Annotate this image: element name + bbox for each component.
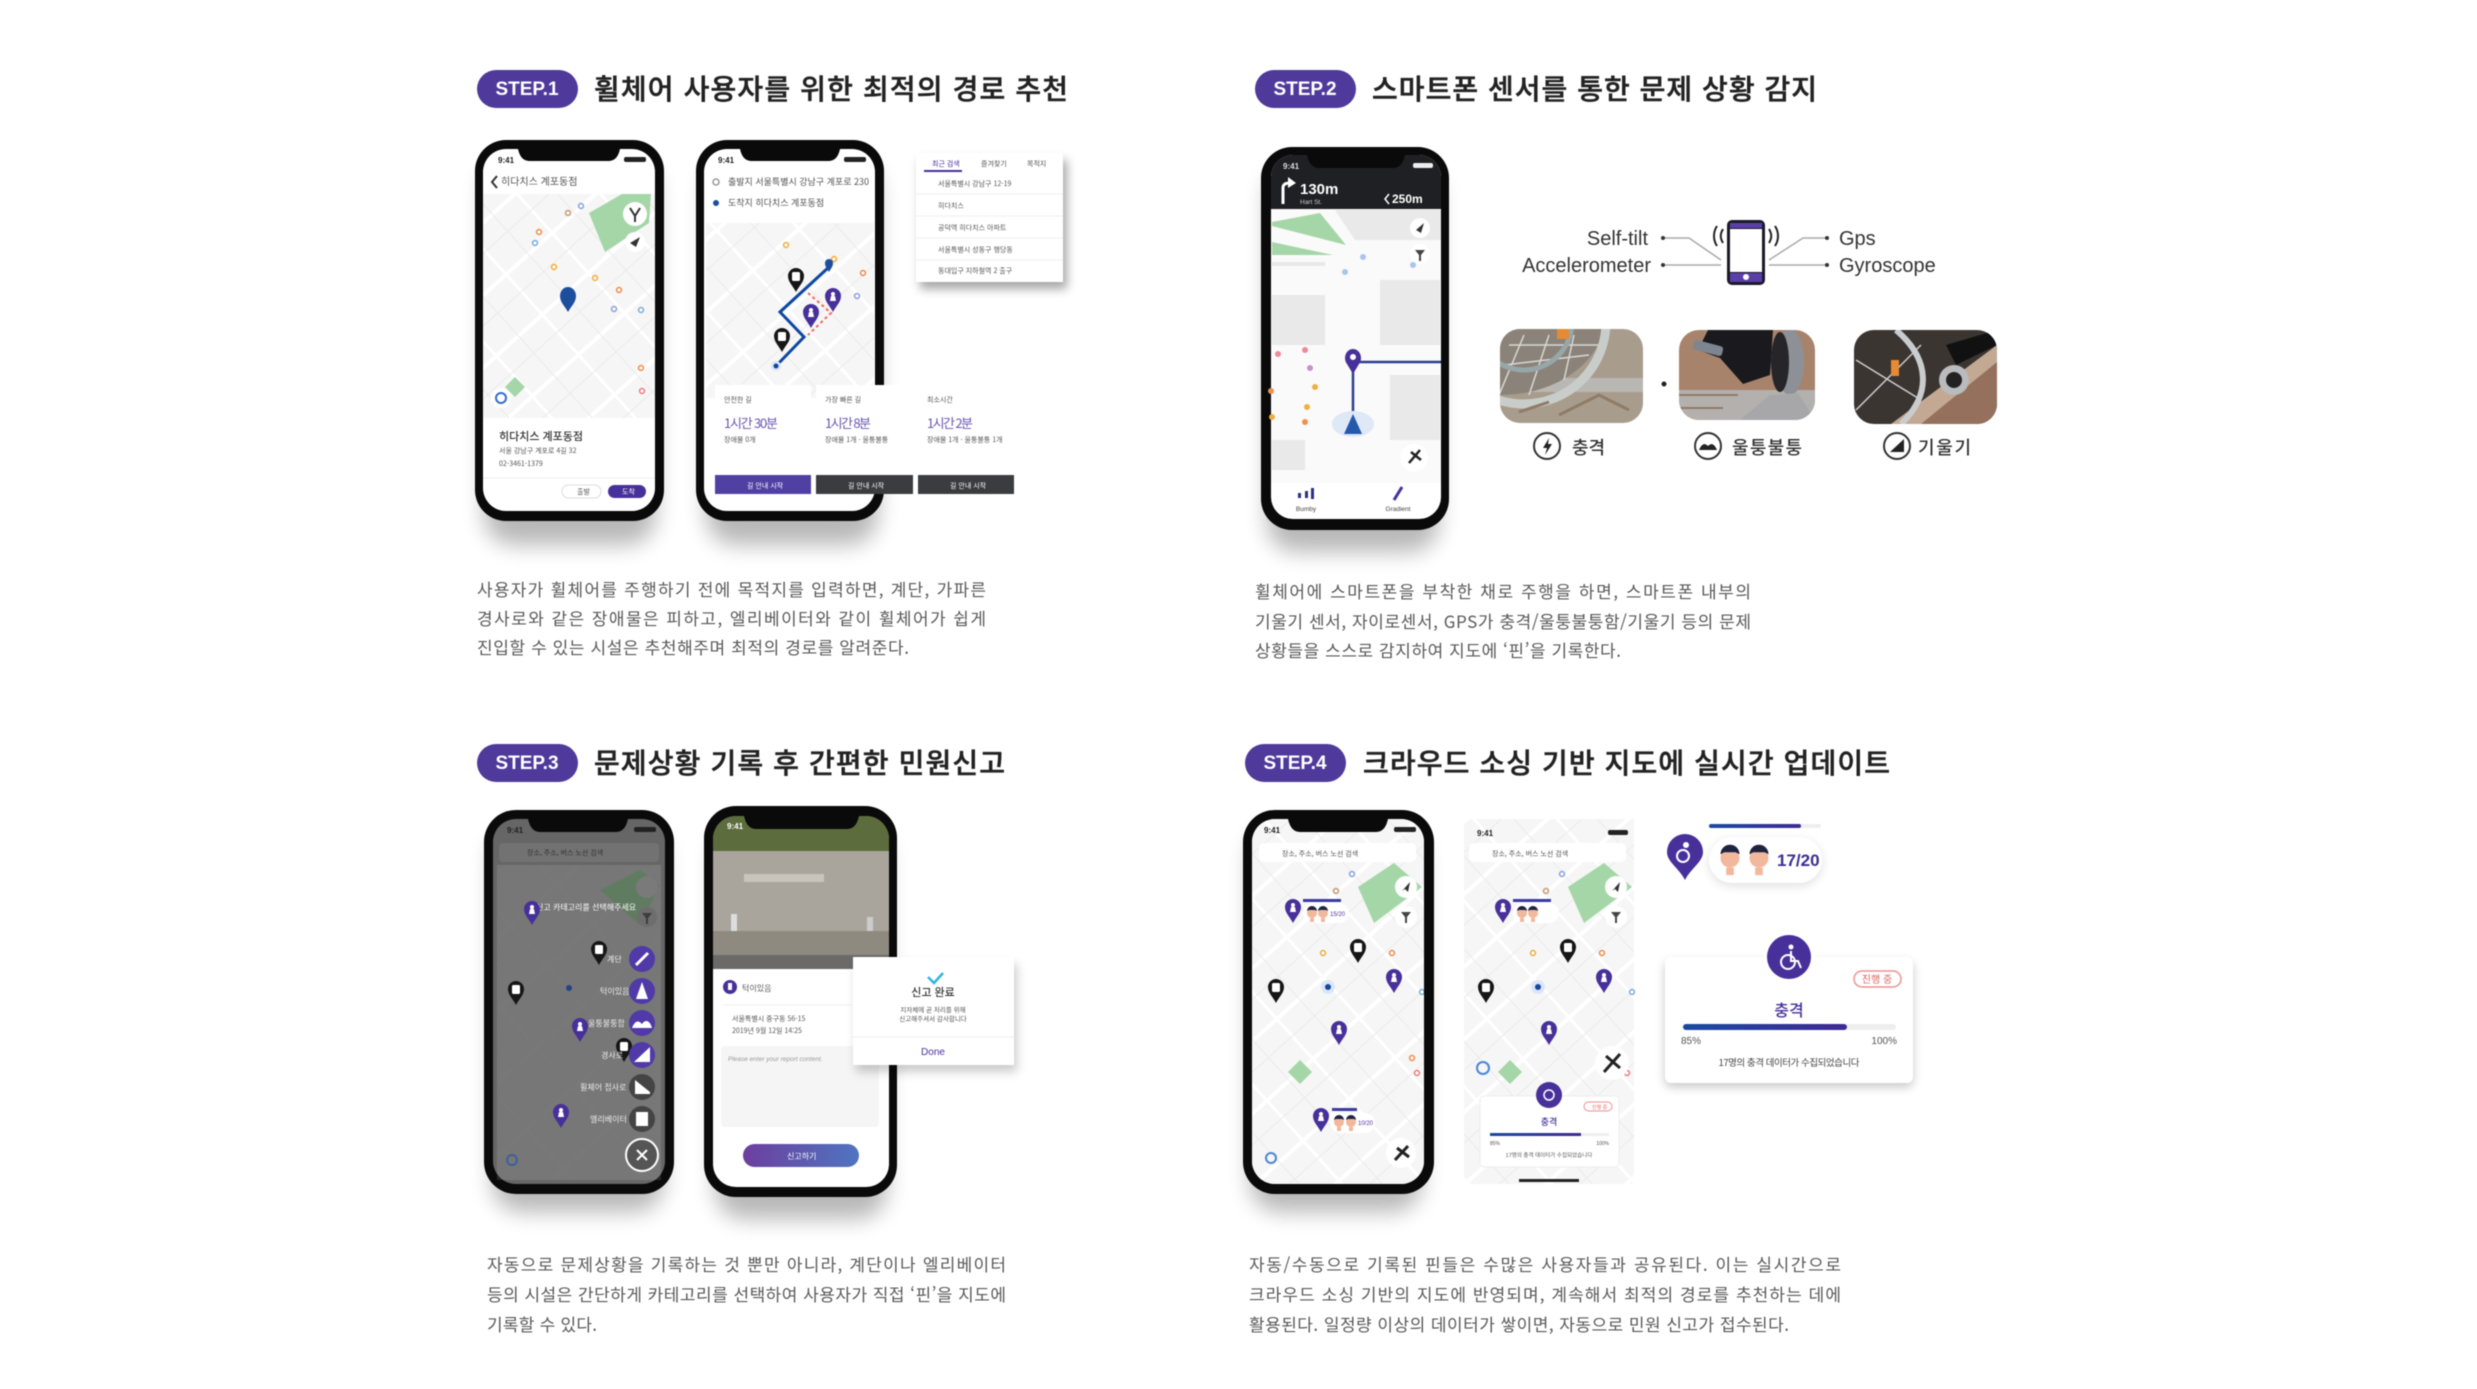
panel: step 3 [477, 742, 1017, 1336]
diagram: smartphone sensors: Self-tilt [1587, 228, 1648, 250]
phone: place detail map: 9:41 [498, 156, 515, 165]
route card: fast: 장애물 1개 · 울퉁불퉁 [825, 435, 889, 445]
label: bumpy: 울퉁불퉁 [1732, 434, 1802, 460]
phone: crowd map [1243, 810, 1434, 1212]
label: slope [1884, 433, 1971, 460]
phone: route map: 9:41 [718, 156, 735, 165]
screen: map with popup: 장소, 주소, 버스 노선 검색 [1492, 849, 1568, 859]
popup: report complete: 신고해주셔서 감사합니다 [899, 1013, 967, 1023]
phone: report form [704, 806, 897, 1219]
step 1 heading: 휠체어 사용자를 위한 최적의 경로 추천 [594, 68, 1068, 108]
phone: report form: 신고하기 [787, 1151, 816, 1162]
phone: category selection: 울퉁불퉁함 [588, 1018, 625, 1029]
phone: place detail map: 02-3461-1379 [499, 459, 543, 469]
phone: navigation: Bumby [1296, 506, 1317, 513]
step 1 description: 사용자가 휠체어를 주행하기 전에 목적지를 입력하면, 계단, 가파른 [477, 576, 986, 601]
callout: pin with crowd count: 17/20 [1777, 851, 1820, 870]
step 2 heading: 스마트폰 센서를 통한 문제 상황 감지 [1372, 68, 1817, 108]
phone: route map: 도착지 히다치스 계포동점 [728, 196, 824, 209]
separator dot [1662, 382, 1666, 386]
route card: shortest: 최소시간 [927, 395, 953, 405]
step 2 badge: STEP.2 [1273, 79, 1337, 100]
phone: crowd map: 장소, 주소, 버스 노선 검색 [1282, 849, 1358, 859]
panel: search history: 동대입구 지하철역 2 출구 [938, 266, 1013, 276]
step 4 badge [1245, 744, 1346, 782]
screen: map with popup: 충격 [1541, 1115, 1557, 1128]
step 4 description: 크라우드 소싱 기반의 지도에 반영되며, 계속해서 최적의 경로를 추천하는 데에 [1249, 1281, 1841, 1306]
phone: navigation: 130m [1300, 181, 1338, 198]
panel: search history: 서울특별시 성동구 행당동 [938, 245, 1013, 255]
route card: safest: 길 안내 시작 [747, 481, 784, 491]
card: impact data status [1665, 931, 1913, 1087]
label: slope: 기울기 [1918, 434, 1971, 460]
diagram: smartphone sensors [1522, 220, 1936, 285]
route card: safest: 안전한 길 [724, 395, 752, 405]
step 4 description: 활용된다. 일정량 이상의 데이터가 쌓이면, 자동으로 민원 신고가 접수된다. [1249, 1311, 1789, 1336]
phone: place detail map: 히다치스 계포동점 [499, 428, 583, 444]
phone: report form: 2019년 9월 12일 14:25 [732, 1026, 802, 1036]
phone: navigation: 9:41 [1283, 162, 1300, 171]
phone: crowd map: 15/20 [1330, 912, 1346, 918]
screen: map with popup: 17명의 충격 데이터가 수집되었습니다 [1506, 1151, 1592, 1159]
phone: route map [696, 140, 884, 545]
diagram: smartphone sensors: Accelerometer [1522, 255, 1651, 277]
step 4 description: 자동/수동으로 기록된 핀들은 수많은 사용자들과 공유된다. 이는 실시간으로 [1249, 1251, 1841, 1276]
step 3 badge: STEP.3 [495, 753, 559, 774]
step 2 description: 상황들을 스스로 감지하여 지도에 ‘핀’을 기록한다. [1255, 637, 1621, 662]
phone: navigation: Hart St. [1300, 199, 1322, 206]
step 2 description: 휠체어에 스마트폰을 부착한 채로 주행을 하면, 스마트폰 내부의 [1255, 578, 1751, 603]
step 3 description: 등의 시설은 간단하게 카테고리를 선택하여 사용자가 직접 ‘핀’을 지도에 [487, 1281, 1006, 1306]
step 3 heading: 문제상황 기록 후 간편한 민원신고 [594, 742, 1005, 782]
step 3 badge [477, 744, 578, 782]
phone: navigation [1261, 147, 1449, 552]
phone: navigation: Gradient [1386, 506, 1411, 513]
screen: map with popup: 100% [1596, 1141, 1610, 1147]
screen: map with popup: 9:41 [1477, 829, 1494, 838]
phone: category selection: 휠체어 접사로 [580, 1082, 626, 1093]
phone: category selection: 턱이있음 [600, 986, 629, 997]
panel: search history: 히다치스 [938, 201, 964, 211]
callout: pin with crowd count [1667, 824, 1822, 886]
card: impact data status: 85% [1681, 1036, 1701, 1047]
step 1 description: 진입할 수 있는 시설은 추천해주며 최적의 경로를 알려준다. [477, 634, 909, 659]
popup: report complete: Done [921, 1047, 945, 1058]
step 1 description [477, 576, 986, 659]
phone: place detail map: 서울 강남구 계포로 4길 32 [499, 446, 577, 456]
step 2 description: 기울기 센서, 자이로센서, GPS가 충격/울퉁불퉁함/기울기 등의 문제 [1255, 608, 1751, 633]
step 4 heading: 크라우드 소싱 기반 지도에 실시간 업데이트 [1363, 742, 1890, 782]
diagram: smartphone sensors: Gyroscope [1839, 255, 1936, 277]
step 2 description [1255, 578, 1751, 662]
phone: category selection: 계단 [607, 954, 622, 965]
panel: step 1 [475, 68, 1068, 659]
popup: report complete [853, 957, 1017, 1072]
route card: shortest: 1시간 2분 [927, 413, 973, 432]
route card: fast: 1시간 8분 [825, 413, 871, 432]
phone: place detail map: 히다치스 계포동점 [501, 173, 577, 188]
panel: search history: 서울특별시 강남구 12-19 [938, 179, 1012, 189]
route card: fast [816, 385, 913, 494]
photo: slope [1854, 330, 1997, 424]
label: impact [1534, 433, 1605, 460]
phone: category selection: 9:41 [507, 826, 524, 835]
card: impact data status: 17명의 충격 데이터가 수집되었습니다 [1718, 1055, 1860, 1069]
phone: place detail map: 도착 [622, 487, 635, 497]
screen: map with popup: 85% [1490, 1141, 1501, 1147]
phone: category selection [484, 810, 674, 1212]
screen: map with popup [1462, 818, 1634, 1184]
step 4 description [1249, 1251, 1841, 1336]
phone: crowd map: 10/20 [1358, 1121, 1374, 1127]
diagram: smartphone sensors: Gps [1839, 228, 1876, 250]
phone: report form: 서울특별시 중구동 56-15 [732, 1014, 806, 1024]
phone: category selection: 경사로 [601, 1050, 623, 1061]
route card: safest [715, 385, 811, 494]
route card: fast: 길 안내 시작 [848, 481, 885, 491]
card: impact data status: 100% [1871, 1036, 1897, 1047]
route card: safest: 장애물 0개 [724, 435, 756, 445]
photo: bumpy [1679, 329, 1815, 420]
phone: category selection: 신고 카테고리를 선택해주세요 [536, 902, 636, 913]
phone: report form: 9:41 [727, 822, 744, 831]
phone: report form: Please enter your report content. [728, 1056, 823, 1063]
phone: place detail map [475, 140, 664, 545]
step 1 badge [477, 70, 578, 108]
panel: search history [916, 153, 1067, 289]
screen: map with popup: 진행 중 [1592, 1104, 1608, 1111]
infographic canvas [472, 69, 1998, 1334]
route card: fast: 가장 빠른 길 [825, 395, 861, 405]
step 1 description: 경사로와 같은 장애물은 피하고, 엘리베이터와 같이 휠체어가 쉽게 [477, 605, 986, 630]
panel: search history: 목적지 [1027, 159, 1046, 169]
phone: crowd map: 9:41 [1264, 826, 1281, 835]
phone: route map: 출발지 서울특별시 강남구 계포로 230 [728, 175, 869, 188]
panel: search history: 즐겨찾기 [981, 159, 1007, 169]
label: impact: 충격 [1572, 434, 1605, 460]
step 3 description: 기록할 수 있다. [487, 1311, 597, 1336]
photo: impact [1499, 328, 1644, 424]
card: impact data status: 충격 [1774, 997, 1804, 1021]
step 2 badge [1255, 70, 1356, 108]
route card: shortest: 길 안내 시작 [950, 481, 987, 491]
panel: search history: 공덕역 히다치스 아파트 [938, 223, 1007, 233]
route card: shortest: 장애물 1개 · 울퉁불퉁 1개 [927, 435, 1003, 445]
step 4 badge: STEP.4 [1263, 753, 1327, 774]
panel: step 4 [1243, 742, 1913, 1336]
step 3 description: 자동으로 문제상황을 기록하는 것 뿐만 아니라, 계단이나 엘리베이터 [487, 1251, 1006, 1276]
panel: step 2 [1255, 68, 1997, 662]
popup: report complete: 신고 완료 [911, 984, 955, 1000]
label: bumpy [1695, 433, 1802, 460]
phone: report form: 턱이있음 [742, 983, 771, 994]
phone: place detail map: 출발 [577, 487, 590, 497]
step 1 badge: STEP.1 [495, 79, 559, 100]
phone: navigation: 250m [1392, 192, 1423, 206]
phone: category selection: 엘리베이터 [590, 1114, 627, 1125]
route card: shortest [918, 385, 1014, 494]
phone: category selection: 장소, 주소, 버스 노선 검색 [527, 848, 603, 858]
route card: safest: 1시간 30분 [724, 413, 778, 432]
step 3 description [487, 1251, 1006, 1336]
popup: report complete: 지자체에 곧 처리를 위해 [900, 1004, 966, 1014]
panel: search history: 최근 검색 [932, 159, 960, 169]
card: impact data status: 진행 중 [1862, 971, 1892, 986]
